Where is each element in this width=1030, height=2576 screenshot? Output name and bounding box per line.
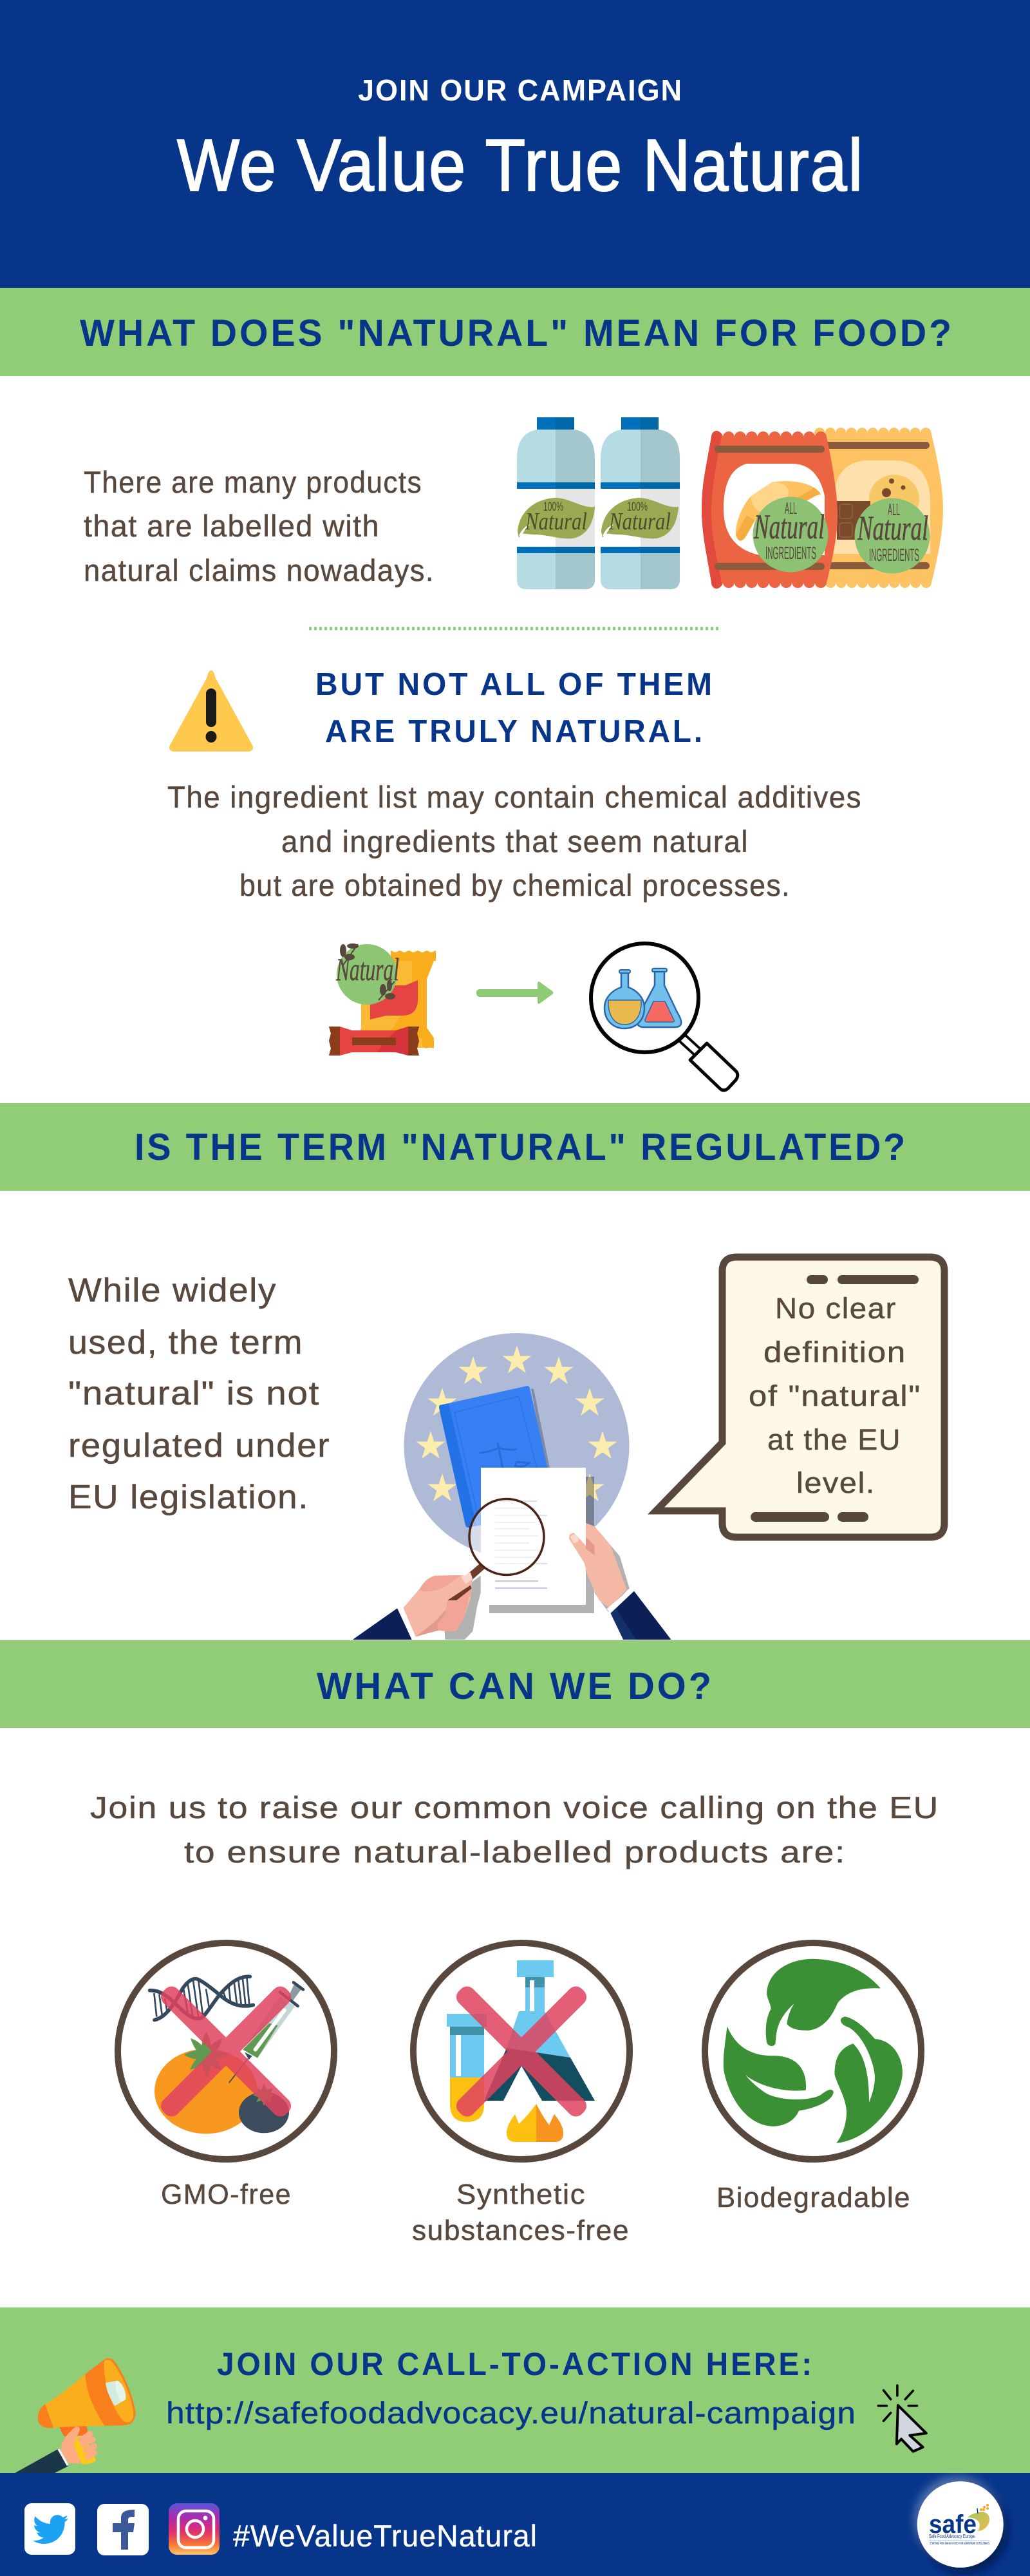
icon: snack bar with natural label: Natural bbox=[335, 951, 399, 987]
icon: bottle two: 100% bbox=[627, 500, 648, 514]
icon: instagram bbox=[169, 2503, 220, 2555]
red cross bbox=[453, 1983, 590, 2120]
callout: no clear definition: at the EU bbox=[767, 1423, 901, 1456]
callout: no clear definition bbox=[656, 1257, 944, 1537]
warning heading bbox=[315, 667, 715, 749]
document with shadow bbox=[481, 1468, 594, 1613]
icon: red snack bag: ALL bbox=[785, 498, 797, 518]
header banner bbox=[0, 0, 1030, 288]
logo: Safe Food Advocacy Europe: safe bbox=[929, 2510, 977, 2539]
icon: GMO-free bbox=[118, 1943, 334, 2159]
icon: snack bar with natural label bbox=[329, 943, 436, 1056]
icon: facebook bbox=[97, 2504, 149, 2555]
logo: Safe Food Advocacy Europe bbox=[914, 2476, 1007, 2573]
call to raise voice text: to ensure natural-labelled products are: bbox=[184, 1835, 846, 1869]
icon: cursor click bbox=[878, 2385, 926, 2452]
label: synthetic substances-free: substances-free bbox=[412, 2215, 630, 2246]
EU circle bbox=[404, 1333, 630, 1558]
warning heading: BUT NOT ALL OF THEM bbox=[315, 667, 715, 702]
regulation text: used, the term bbox=[68, 1324, 303, 1361]
icon: yellow snack bag: Natural bbox=[857, 509, 928, 547]
left hand holding magnifier bbox=[353, 1563, 485, 1640]
EU stars bbox=[416, 1345, 617, 1501]
icon: synthetic substances-free bbox=[413, 1943, 630, 2159]
regulation text: regulated under bbox=[68, 1427, 330, 1464]
logo: Safe Food Advocacy Europe: STRIVING FOR SAFER FOOD FOR EUROPEAN CONSUMERS bbox=[930, 2542, 989, 2546]
logo: Safe Food Advocacy Europe: Safe Food Advocacy Europe bbox=[929, 2533, 975, 2539]
icon: bottle two: Natural bbox=[608, 508, 671, 535]
kicker: join our campaign: JOIN OUR CAMPAIGN bbox=[358, 73, 683, 107]
section heading: is the term regulated: IS THE TERM "NATURAL" REGULATED? bbox=[135, 1126, 908, 1168]
label: GMO-free: GMO-free bbox=[161, 2179, 292, 2210]
icon: yellow snack bag: INGREDIENTS bbox=[869, 545, 919, 565]
icon: red snack bag: Natural bbox=[753, 507, 825, 546]
callout: no clear definition: No clear bbox=[775, 1292, 897, 1325]
section heading: is the term regulated bbox=[0, 1103, 1030, 1191]
arrow bbox=[476, 981, 554, 1004]
law book bbox=[439, 1386, 557, 1528]
section heading: what can we do: WHAT CAN WE DO? bbox=[317, 1665, 714, 1707]
label: biodegradable: Biodegradable bbox=[716, 2182, 911, 2213]
label: synthetic substances-free: Synthetic bbox=[456, 2179, 586, 2210]
regulation text: "natural" is not bbox=[68, 1375, 320, 1412]
CTA heading: JOIN OUR CALL-TO-ACTION HERE: bbox=[217, 2346, 814, 2382]
intro text: There are many products bbox=[84, 465, 422, 499]
footer band bbox=[0, 2473, 1030, 2576]
magnifying glass bbox=[469, 1499, 544, 1575]
hashtag: #WeValueTrueNatural bbox=[233, 2519, 538, 2553]
icon: red snack bag: INGREDIENTS bbox=[765, 543, 816, 563]
section heading: what does natural mean bbox=[0, 288, 1030, 376]
label: synthetic substances-free bbox=[412, 2179, 630, 2246]
title: We Value True Natural bbox=[177, 125, 864, 207]
icon: bottle one bbox=[517, 417, 595, 589]
intro text: natural claims nowadays. bbox=[84, 553, 435, 587]
section heading: what does natural mean: WHAT DOES "NATURAL" MEAN FOR FOOD? bbox=[80, 312, 954, 354]
icon: yellow snack bag: ALL bbox=[888, 500, 900, 519]
illustration: EU stars, law book, document and hands bbox=[353, 1333, 671, 1640]
call to raise voice text: Join us to raise our common voice calling on the EU bbox=[90, 1790, 939, 1824]
icon: yellow snack bag bbox=[814, 428, 943, 588]
regulation text: While widely bbox=[68, 1272, 277, 1309]
CTA url: http://safefoodadvocacy.eu/natural-campaign bbox=[166, 2396, 856, 2430]
ingredient explanation text bbox=[167, 780, 862, 902]
regulation text: EU legislation. bbox=[68, 1479, 309, 1516]
callout: no clear definition: definition bbox=[763, 1336, 906, 1368]
icon: warning triangle bbox=[169, 670, 253, 752]
icon: bottle two bbox=[601, 417, 680, 589]
red cross bbox=[158, 1983, 294, 2120]
icon: red snack bag bbox=[702, 431, 838, 589]
icon: biodegradable leaves bbox=[705, 1943, 921, 2159]
ingredient explanation text: but are obtained by chemical processes. bbox=[239, 868, 791, 902]
call to raise voice text bbox=[90, 1790, 939, 1869]
intro text: that are labelled with bbox=[84, 509, 380, 543]
icon: bottle one: 100% bbox=[543, 500, 563, 514]
ingredient explanation text: and ingredients that seem natural bbox=[281, 824, 749, 858]
call-to-action band bbox=[0, 2307, 1030, 2473]
icon: megaphone with hand bbox=[15, 2358, 136, 2473]
right hand holding paper bbox=[569, 1523, 671, 1640]
callout: no clear definition: of "natural" bbox=[749, 1379, 921, 1412]
ingredient explanation text: The ingredient list may contain chemical additives bbox=[167, 780, 862, 814]
regulation text bbox=[68, 1272, 330, 1516]
icon: magnifier with flasks bbox=[591, 943, 738, 1090]
callout: no clear definition: level. bbox=[796, 1466, 876, 1499]
icon: twitter bbox=[24, 2503, 75, 2555]
section heading: what can we do bbox=[0, 1640, 1030, 1728]
icon: bottle one: Natural bbox=[525, 508, 587, 535]
intro text bbox=[84, 465, 435, 587]
warning heading: ARE TRULY NATURAL. bbox=[325, 714, 705, 749]
